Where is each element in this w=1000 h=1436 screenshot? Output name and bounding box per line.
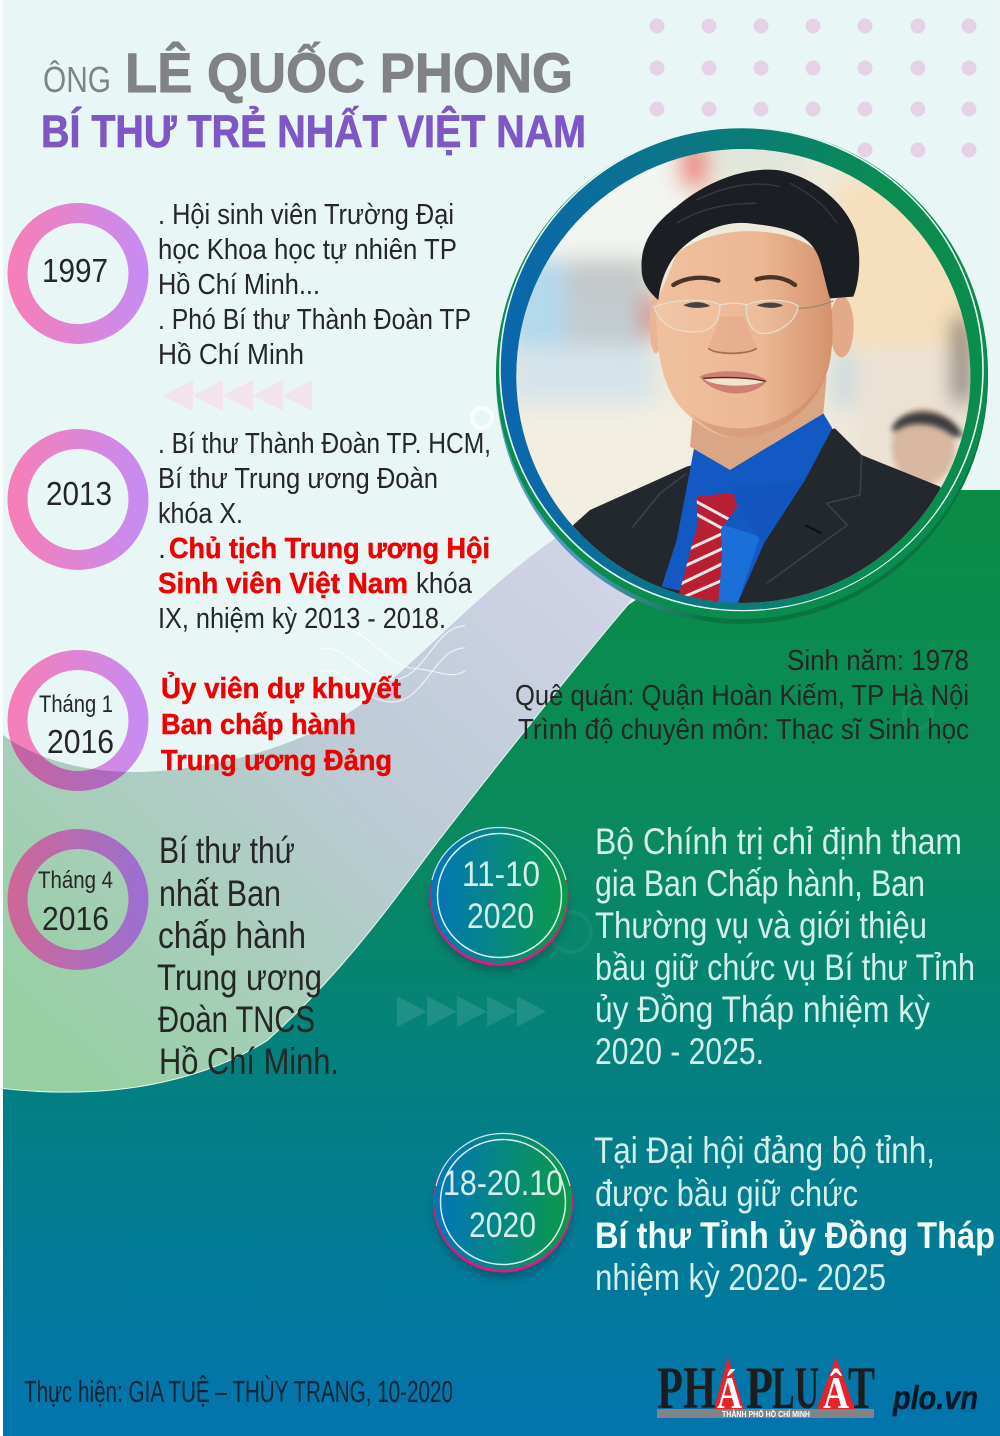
text block Politburo appointment: ủy Đồng Tháp nhiệm kỳ — [595, 989, 930, 1030]
text block January 2016: Ban chấp hành — [161, 709, 356, 741]
date badge 18-20.10 2020: 2020 — [469, 1206, 536, 1245]
newspaper logo: T — [848, 1355, 875, 1421]
newspaper logo: Á — [717, 1367, 742, 1418]
blue shirt and collar — [662, 413, 832, 604]
pale top background shape — [0, 0, 1000, 1092]
newspaper logo: PH — [657, 1355, 716, 1421]
personal details: Sinh năm: 1978 — [787, 645, 969, 677]
timeline ring April 2016 — [18, 839, 138, 960]
text block 2013: . — [158, 533, 166, 565]
timeline ring 2013 — [18, 439, 138, 560]
nose — [708, 317, 757, 355]
hair — [641, 170, 859, 300]
timeline ring January 2016 — [18, 660, 138, 781]
eyebrows — [673, 277, 795, 285]
text block provincial congress: được bầu giữ chức — [595, 1173, 858, 1214]
lavender to green curved band — [3, 500, 700, 1092]
timeline ring April 2016: 2016 — [42, 900, 109, 937]
tie — [679, 492, 738, 602]
text block provincial congress: Tại Đại hội đảng bộ tỉnh, — [594, 1130, 935, 1171]
text block Politburo appointment — [595, 821, 975, 1072]
text block April 2016: nhất Ban — [159, 873, 281, 914]
text block January 2016: Trung ương Đảng — [161, 745, 392, 777]
text block Politburo appointment: gia Ban Chấp hành, Ban — [595, 863, 925, 904]
arrows pointing left — [163, 380, 312, 411]
date badge 18-20.10 2020: 18-20.10 — [443, 1164, 563, 1203]
text block April 2016: chấp hành — [158, 915, 306, 956]
left white edge strip — [0, 0, 3, 1436]
timeline ring 2013: 2013 — [46, 475, 112, 512]
jacket — [573, 428, 940, 603]
mouth — [699, 371, 767, 393]
timeline ring 1997: 1997 — [42, 252, 108, 289]
text block 2013: khóa — [416, 568, 473, 600]
text block 1997: . Phó Bí thư Thành Đoàn TP — [158, 304, 471, 336]
text block 2013: Sinh viên Việt Nam — [158, 568, 408, 600]
title — [41, 41, 586, 157]
text block January 2016 — [161, 671, 401, 777]
text block 1997: . Hội sinh viên Trường Đại — [158, 199, 454, 231]
text block 2013: Chủ tịch Trung ương Hội — [169, 533, 490, 565]
face — [690, 377, 827, 470]
decorative dot grid — [650, 18, 976, 158]
personal details — [515, 645, 969, 746]
date badge 11-10 2020: 11-10 — [462, 855, 540, 894]
timeline ring January 2016: Tháng 1 — [39, 691, 113, 718]
text block 2013: khóa X. — [158, 498, 243, 530]
title: LÊ QUỐC PHONG — [125, 41, 573, 104]
text block April 2016: Hồ Chí Minh. — [159, 1041, 339, 1082]
text block April 2016: Bí thư thứ — [159, 830, 295, 871]
text block 1997: học Khoa học tự nhiên TP — [158, 234, 457, 266]
text block Politburo appointment: 2020 - 2025. — [595, 1031, 764, 1072]
newspaper logo — [657, 1355, 875, 1421]
date badge 11-10 2020: 2020 — [467, 897, 534, 936]
newspaper logo: LU — [772, 1355, 819, 1421]
timeline ring January 2016: 2016 — [47, 723, 114, 760]
newspaper logo: THÀNH PHỐ HỒ CHÍ MINH — [722, 1409, 810, 1419]
text block 1997: Hồ Chí Minh... — [158, 269, 320, 301]
glasses — [654, 300, 833, 333]
text block 1997: Hồ Chí Minh — [158, 339, 304, 371]
newspaper logo: P — [746, 1355, 773, 1421]
text block January 2016: Ủy viên dự khuyết — [161, 671, 401, 705]
newspaper logo: Ậ — [823, 1367, 849, 1418]
title: BÍ THƯ TRẺ NHẤT VIỆT NAM — [41, 106, 586, 157]
date badge 11-10 2020 — [430, 826, 568, 973]
portrait ring layers — [496, 127, 988, 624]
credit line: Thực hiện: GIA TUỆ – THÙY TRANG, 10-2020 — [24, 1374, 453, 1409]
wave lines decoration — [318, 626, 465, 702]
dark green to blue background — [0, 489, 1000, 1436]
arrows pointing right — [397, 996, 546, 1027]
eyes — [683, 302, 783, 308]
text block 2013 — [158, 428, 491, 635]
faint ring beside portrait — [472, 408, 492, 428]
text block April 2016: Đoàn TNCS — [158, 999, 315, 1040]
timeline ring 1997 — [18, 213, 138, 334]
text block 1997 — [158, 199, 471, 371]
text block 2013: . Bí thư Thành Đoàn TP. HCM, — [158, 428, 491, 460]
text block provincial congress: nhiệm kỳ 2020- 2025 — [595, 1257, 886, 1298]
text block Politburo appointment: Thường vụ và giới thiệu — [595, 905, 927, 946]
text block April 2016 — [157, 830, 339, 1082]
photo blurred background — [510, 143, 977, 610]
faint circles — [551, 701, 932, 952]
website label: plo.vn — [892, 1379, 978, 1416]
text block provincial congress — [594, 1130, 995, 1298]
date badge 18-20.10 2020 — [433, 1132, 573, 1279]
title: ÔNG — [43, 59, 111, 100]
timeline ring April 2016: Tháng 4 — [38, 867, 113, 894]
portrait photo — [510, 143, 997, 613]
text block 2013: Bí thư Trung ương Đoàn — [158, 463, 438, 495]
text block April 2016: Trung ương — [157, 957, 322, 998]
text block 2013: IX, nhiệm kỳ 2013 - 2018. — [158, 603, 446, 635]
